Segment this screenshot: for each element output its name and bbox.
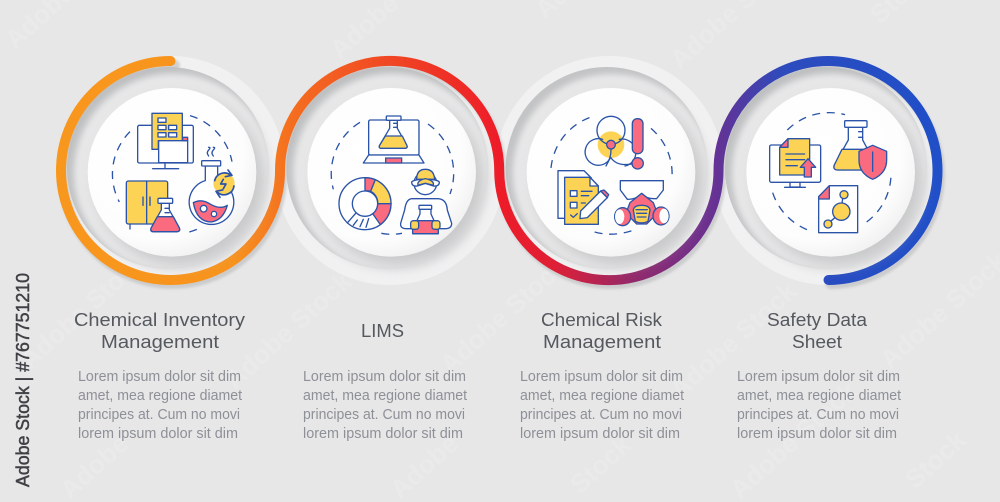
- column 1 body text: Lorem ipsum dolor sit dim: [78, 369, 241, 385]
- icon: molecule document: [819, 186, 858, 233]
- column 4 heading: Sheet: [792, 331, 842, 352]
- icon: dashed arcs: [112, 116, 232, 232]
- panel: safety data sheet icon: [746, 88, 915, 257]
- column 2 body text: principes at. Cum no movi: [303, 407, 465, 423]
- ribbon connecting all steps: [61, 61, 937, 280]
- column 4 body text: Lorem ipsum dolor sit dim: [737, 369, 900, 385]
- watermark pattern: Adobe Stock: [14, 245, 153, 374]
- icon: flask with shield: [834, 121, 887, 179]
- stock credit: Adobe Stock | #767751210: [13, 273, 33, 487]
- column 4 body text: [737, 369, 901, 442]
- panel: chemical risk icon: [527, 88, 695, 257]
- icon: monitor with database: [138, 113, 193, 169]
- column 3 body text: lorem ipsum dolor sit dim: [520, 426, 680, 442]
- column 1 heading: [74, 309, 246, 352]
- disc shadows: [96, 97, 922, 265]
- column 2 heading: LIMS: [361, 320, 404, 341]
- column 4 body text: lorem ipsum dolor sit dim: [737, 426, 897, 442]
- recessed ring shadows: [67, 67, 927, 269]
- column 1 body text: amet, mea regione diamet: [78, 388, 242, 404]
- column 1 heading: Management: [101, 331, 219, 352]
- column 2 body text: Lorem ipsum dolor sit dim: [303, 369, 466, 385]
- column 2 body text: amet, mea regione diamet: [303, 388, 467, 404]
- icon: monitor with document: [770, 139, 821, 187]
- column 2 body text: [303, 369, 467, 442]
- panel: chemical inventory icon: [88, 88, 256, 257]
- icon: round flask with refresh: [189, 147, 235, 224]
- column 4 body text: principes at. Cum no movi: [737, 407, 899, 423]
- icon: cabinet and flask: [126, 181, 180, 232]
- column 3 body text: amet, mea regione diamet: [520, 388, 684, 404]
- watermark pattern: Stock: [564, 429, 637, 499]
- watermark pattern: Stock: [899, 424, 972, 494]
- column 4 body text: amet, mea regione diamet: [737, 388, 901, 404]
- icon: checklist with pencil: [558, 171, 609, 224]
- icon: donut chart: [339, 178, 391, 230]
- icon: biohazard sign: [585, 116, 636, 166]
- icon: dashed arcs: [331, 122, 454, 234]
- icon: dashed arcs: [773, 113, 891, 231]
- column 4 heading: [767, 309, 868, 352]
- watermark pattern: Adobe Stock: [724, 375, 863, 502]
- icon: goggles and respirator: [615, 181, 669, 226]
- ribbon shadow: [63, 65, 940, 284]
- column 3 heading: [541, 309, 663, 352]
- column 1 body text: lorem ipsum dolor sit dim: [78, 426, 238, 442]
- column 1 heading: Chemical Inventory: [74, 309, 246, 330]
- icon: laptop with flask: [363, 116, 424, 163]
- watermark pattern: Adobe Stock: [434, 250, 573, 379]
- column 4 heading: Safety Data: [767, 309, 868, 330]
- column 1 body text: [78, 369, 242, 442]
- column 3 body text: principes at. Cum no movi: [520, 407, 682, 423]
- column 2 body text: lorem ipsum dolor sit dim: [303, 426, 463, 442]
- icon: dashed arcs: [551, 116, 672, 234]
- watermark pattern: Adobe Stock: [219, 265, 358, 394]
- panel: LIMS icon: [307, 88, 476, 257]
- column 3 body text: Lorem ipsum dolor sit dim: [520, 369, 683, 385]
- column 3 body text: [520, 369, 684, 442]
- icon: exclamation mark: [632, 119, 643, 169]
- pale background rings: [56, 56, 943, 285]
- column 1 body text: principes at. Cum no movi: [78, 407, 240, 423]
- watermark pattern: Adobe Stock: [664, 275, 803, 404]
- column 3 heading: Chemical Risk: [541, 309, 663, 330]
- icon: scientist with flask: [401, 169, 452, 234]
- column 3 heading: Management: [543, 331, 661, 352]
